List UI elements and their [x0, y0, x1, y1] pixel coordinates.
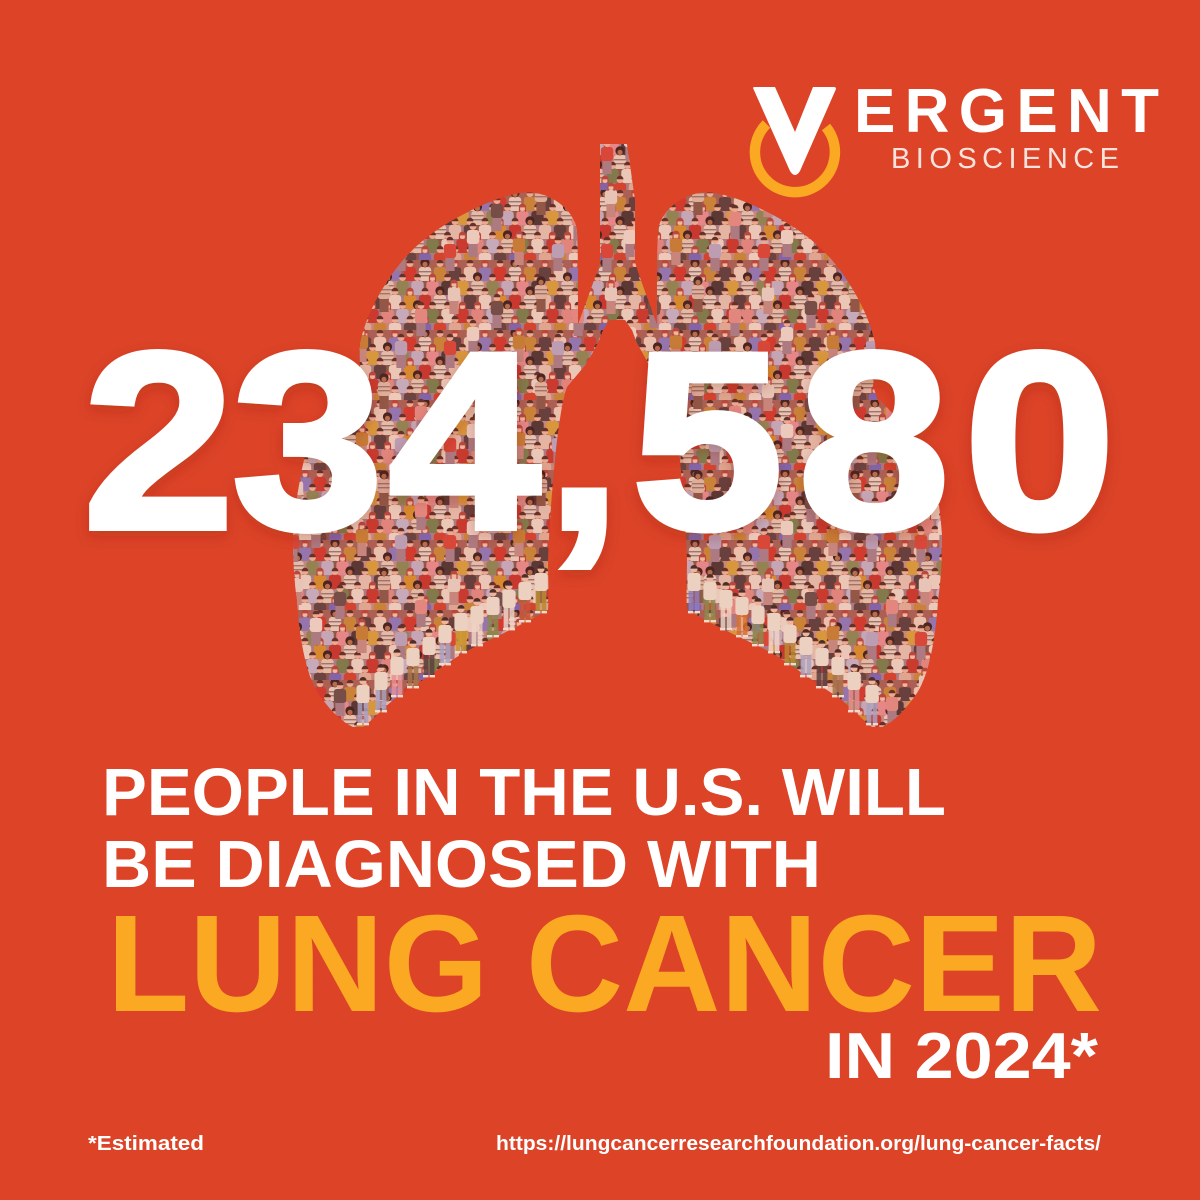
big number: 234,580 — [83, 300, 1115, 582]
logo: Vergent Bioscience — [753, 77, 1159, 192]
highlight: lung cancer: LUNG CANCER — [107, 887, 1102, 1041]
crowd texture clipped to lung shape — [285, 140, 950, 735]
front row of standing people, right lung — [687, 565, 879, 725]
logo word BIOSCIENCE: BIOSCIENCE — [891, 143, 1119, 175]
front row of standing people, left lung — [356, 565, 548, 725]
headline line 1: PEOPLE IN THE U.S. WILL — [102, 755, 946, 830]
lungs made of crowd of people — [285, 140, 950, 735]
source url: https://lungcancerresearchfoundation.org/lung-cancer-facts/ — [496, 1133, 1101, 1155]
footnote: estimated: *Estimated — [88, 1133, 204, 1155]
logo word VERGENT: ERGENT — [854, 77, 1159, 146]
headline line 2: BE DIAGNOSED WITH — [102, 827, 821, 902]
headline: in 2024: IN 2024* — [825, 1019, 1099, 1092]
logo V — [753, 87, 836, 175]
logo ring — [755, 124, 835, 192]
infographic canvas — [86, 87, 1158, 1154]
